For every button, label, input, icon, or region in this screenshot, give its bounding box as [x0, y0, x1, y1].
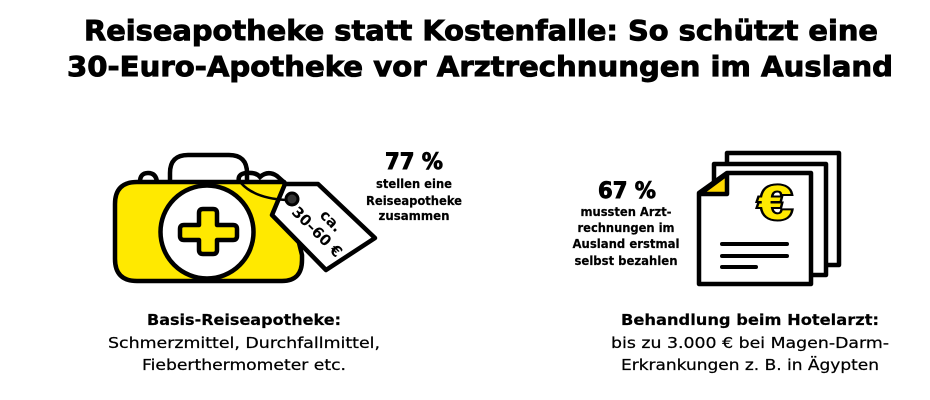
stat: 67 percent: 67 %: [598, 179, 656, 204]
stat: 67 percent: [572, 179, 680, 268]
text block: Behandlung beim Hotelarzt: Behandlung beim Hotelarzt:: [621, 311, 879, 329]
text block: Behandlung beim Hotelarzt: bis zu 3.000 € bei Magen-Darm-: [611, 334, 889, 352]
icon: euro sign: €: [758, 177, 792, 230]
icon: bag body: [115, 182, 302, 281]
stat: 77 percent: stellen eine: [376, 177, 452, 191]
price tag text: 30–60 €: [288, 203, 346, 261]
icon: first aid bag with price tag: [115, 155, 375, 281]
text block: Behandlung beim Hotelarzt: [611, 311, 889, 374]
icon: back sheets: [714, 153, 839, 275]
title: Reiseapotheke statt Kostenfalle: So schützt eine: [84, 14, 878, 47]
icon: text lines: [722, 244, 787, 267]
stat: 67 percent: Ausland erstmal: [572, 237, 680, 251]
text block: Basis-Reiseapotheke: [108, 311, 380, 374]
stat: 77 percent: 77 %: [385, 150, 443, 175]
title: [67, 14, 893, 83]
price tag text: ca.: [316, 206, 346, 236]
stat: 77 percent: zusammen: [378, 209, 450, 223]
title: 30-Euro-Apotheke vor Arztrechnungen im Ausland: [67, 50, 893, 83]
stat: 67 percent: selbst bezahlen: [574, 254, 678, 268]
stat: 77 percent: [366, 150, 462, 223]
icon: price tag: [241, 183, 375, 270]
icon: front sheet: [699, 173, 811, 284]
stat: 67 percent: mussten Arzt-: [580, 205, 672, 219]
text block: Basis-Reiseapotheke: Schmerzmittel, Durchfallmittel,: [108, 334, 380, 352]
text block: Behandlung beim Hotelarzt: Erkrankungen z. B. in Ägypten: [621, 355, 879, 374]
icon: folded corner: [700, 174, 727, 194]
stat: 77 percent: Reiseapotheke: [366, 194, 462, 208]
text block: Basis-Reiseapotheke: Basis-Reiseapotheke:: [147, 311, 341, 329]
stat: 67 percent: rechnungen im: [578, 221, 674, 235]
icon: bag handles: [140, 155, 286, 184]
icon: medical cross in circle: [160, 186, 254, 278]
icon: stacked invoices with euro sign: [699, 153, 839, 284]
text block: Basis-Reiseapotheke: Fieberthermometer etc.: [142, 356, 346, 374]
